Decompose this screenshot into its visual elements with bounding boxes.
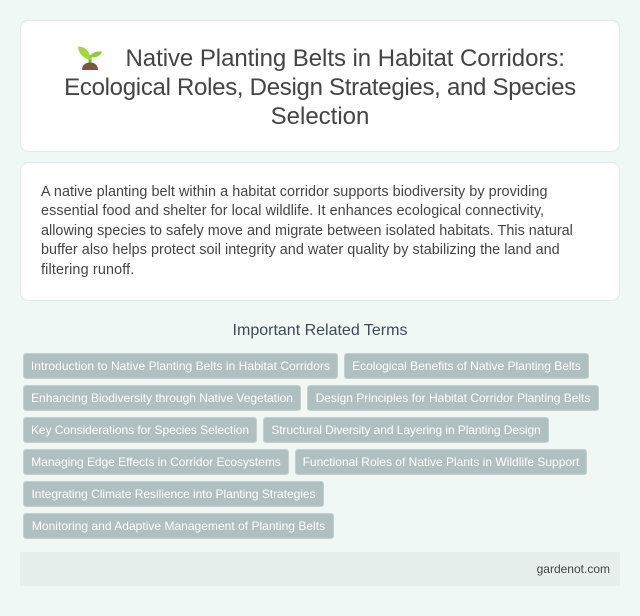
- title: Native Planting Belts in Habitat Corridors:: [126, 45, 565, 72]
- chip: Ecological Benefits of Native Planting Belts: [352, 359, 581, 373]
- description card: [20, 162, 620, 301]
- title: Ecological Roles, Design Strategies, and Species: [64, 74, 576, 101]
- title: Selection: [271, 103, 369, 130]
- chip: [263, 417, 549, 443]
- title: [64, 45, 576, 130]
- chip: [23, 449, 289, 475]
- chip: [23, 353, 338, 379]
- chip: [295, 449, 587, 475]
- chip: [307, 385, 599, 411]
- footer bar: gardenot.com: [537, 562, 610, 576]
- chip: Design Principles for Habitat Corridor Planting Belts: [316, 391, 590, 405]
- related terms heading: Important Related Terms: [233, 322, 407, 339]
- chip: Structural Diversity and Layering in Planting Design: [271, 423, 541, 437]
- chip: Introduction to Native Planting Belts in Habitat Corridors: [31, 359, 330, 373]
- chip: [23, 385, 301, 411]
- description text: essential food and shelter for local wildlife. It enhances ecological connectivity,: [41, 203, 544, 219]
- description text: buffer also helps protect soil integrity and water quality by stabilizing the land and: [41, 242, 560, 258]
- description text: filtering runoff.: [41, 262, 134, 278]
- chip: Functional Roles of Native Plants in Wildlife Support: [303, 455, 579, 469]
- chip: [344, 353, 589, 379]
- description text: allowing species to safely move and migrate between isolated habitats. This natural: [41, 223, 573, 239]
- related terms chips: [23, 353, 599, 539]
- chip: [23, 417, 257, 443]
- chip: Integrating Climate Resilience into Planting Strategies: [32, 487, 315, 501]
- description text: A native planting belt within a habitat corridor supports biodiversity by providing: [41, 184, 548, 200]
- chip: [23, 481, 324, 507]
- chip: Key Considerations for Species Selection: [31, 423, 249, 437]
- chip: Enhancing Biodiversity through Native Vegetation: [31, 391, 293, 405]
- description text: [41, 184, 573, 278]
- chip: Monitoring and Adaptive Management of Planting Belts: [32, 519, 325, 533]
- chip: [23, 513, 334, 539]
- chip: Managing Edge Effects in Corridor Ecosystems: [31, 455, 281, 469]
- icon: sprout: [78, 46, 102, 70]
- title card: [20, 20, 620, 152]
- footer bar: [20, 552, 620, 586]
